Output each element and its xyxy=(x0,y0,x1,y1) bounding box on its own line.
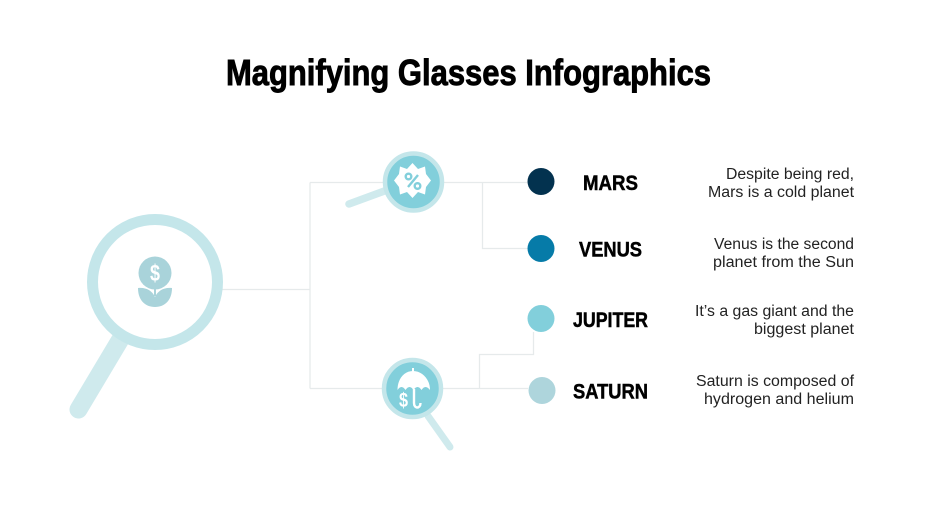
description: It’s a gas giant and the xyxy=(695,303,854,320)
lower magnifying glass xyxy=(384,360,450,447)
label: MARS xyxy=(583,172,638,195)
row: Venus: planet from the Sun xyxy=(713,254,854,271)
label: JUPITER xyxy=(573,309,648,332)
row: Jupiter: biggest planet xyxy=(754,321,855,338)
row: Saturn xyxy=(528,373,855,408)
description: Despite being red, xyxy=(726,166,854,183)
icon: money plant: $ xyxy=(150,260,160,286)
upper magnifying glass xyxy=(349,154,442,210)
description: Venus is the second xyxy=(714,236,854,253)
connector lines xyxy=(222,182,534,388)
lens xyxy=(384,360,441,417)
lens xyxy=(385,154,442,210)
dot xyxy=(528,235,554,262)
icon: percent badge xyxy=(394,163,431,198)
dot xyxy=(528,168,554,195)
row: Jupiter xyxy=(528,303,855,338)
dot xyxy=(528,305,554,332)
description: Saturn is composed of xyxy=(696,373,855,390)
handle xyxy=(349,189,390,204)
label: SATURN xyxy=(573,380,648,404)
handle xyxy=(78,340,120,410)
label: VENUS xyxy=(579,238,642,262)
row: Saturn: hydrogen and helium xyxy=(704,391,854,408)
title: Magnifying Glasses Infographics xyxy=(226,52,711,93)
handle xyxy=(428,416,450,447)
large magnifying glass xyxy=(78,220,218,410)
icon: money plant xyxy=(138,256,172,307)
dot xyxy=(528,377,556,404)
icon: umbrella and dollar: $ xyxy=(399,390,408,412)
lens ring xyxy=(92,220,218,344)
row: Venus xyxy=(528,235,854,271)
row: Mars: Mars is a cold planet xyxy=(708,184,855,201)
row: Mars xyxy=(528,166,855,201)
